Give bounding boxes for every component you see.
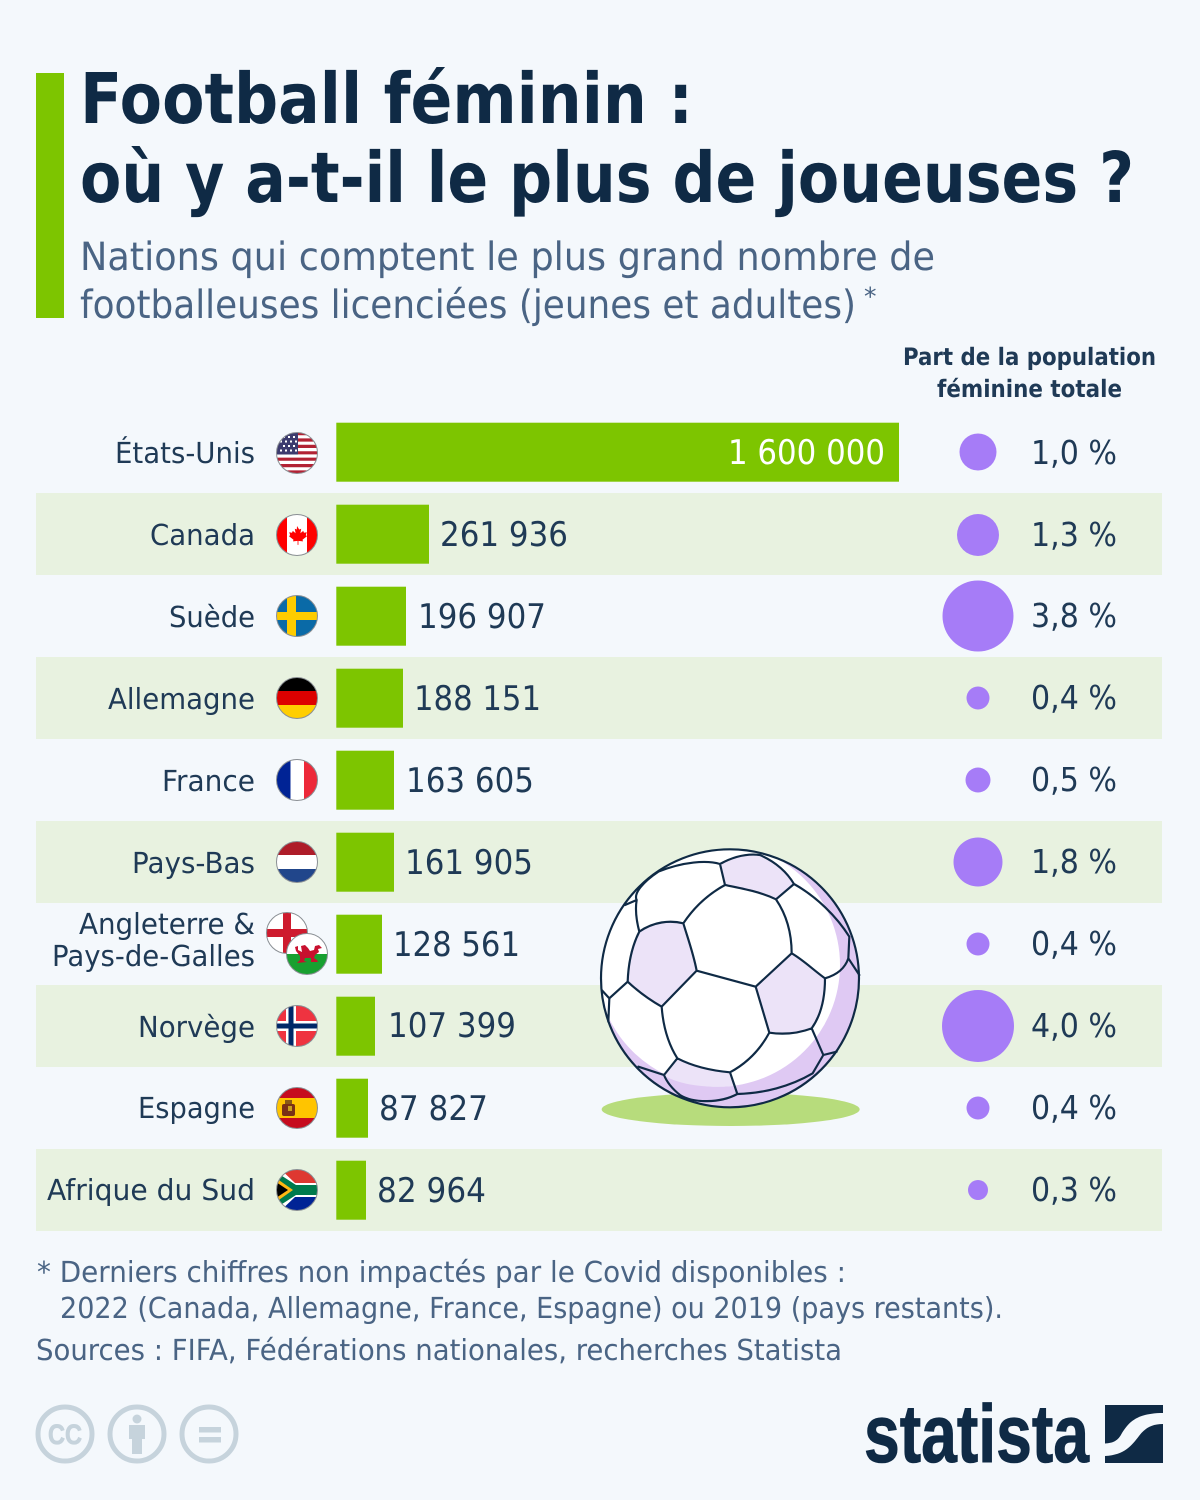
row: Suède: Suède [169,600,255,634]
row: Pays-Bas [36,821,1162,903]
subtitle: Nations qui comptent le plus grand nombre de [80,235,935,280]
row: Pays-Bas: Pays-Bas [132,846,255,880]
row: Angleterre & Pays-de-Galles [52,907,1117,975]
title: Football féminin : [80,58,693,140]
row: Angleterre & Pays-de-Galles: 0,4 % [1031,924,1117,963]
subtitle [80,235,935,328]
row: Angleterre & Pays-de-Galles: 128 561 [393,925,520,965]
sources: Sources : FIFA, Fédérations nationales, recherches Statista [36,1333,842,1367]
footnote [37,1255,1003,1325]
bubble: 1,8 % [954,838,1002,886]
row: Suède [169,580,1117,652]
icon: creative commons [38,1407,92,1461]
bar: 1 600 000 [336,423,899,482]
icon: no derivatives [182,1407,236,1461]
row: Afrique du Sud: Afrique du Sud [47,1173,255,1207]
row: Espagne: 0,4 % [1031,1088,1117,1127]
row: États-Unis: États-Unis [115,436,255,470]
footnote: * Derniers chiffres non impactés par le Covid disponibles : [37,1255,846,1289]
subtitle: * [864,282,876,311]
bubble: 0,4 % [966,1096,990,1120]
grass shadow [602,1093,860,1126]
row: Espagne: 87 827 [379,1089,488,1129]
logo: statista: statista [864,1389,1090,1480]
row: Angleterre & Pays-de-Galles: Pays-de-Galles [52,939,255,973]
bar: 128 561 [336,915,382,974]
row: France: 163 605 [406,761,534,801]
flag: Suède [276,595,318,637]
row: Canada: 261 936 [440,515,568,555]
footnote: 2022 (Canada, Allemagne, France, Espagne) ou 2019 (pays restants). [60,1291,1003,1325]
bubble: 4,0 % [942,990,1014,1062]
bubble: 0,3 % [968,1180,988,1200]
row: Angleterre & Pays-de-Galles: Angleterre & [79,907,255,941]
flag: Pays-Bas [276,841,318,884]
subtitle: footballeuses licenciées (jeunes et adultes) [80,283,856,328]
row: Afrique du Sud: 82 964 [377,1171,486,1211]
flag: Canada [276,514,318,556]
title [80,58,1134,219]
row: Norvège: 107 399 [388,1006,516,1046]
column heading: part de la population féminine totale [903,343,1156,403]
flag: Angleterre [266,912,308,954]
bar: 161 905 [336,833,394,892]
row: Espagne: Espagne [138,1091,255,1125]
flag: Pays de Galles [286,933,328,975]
row: Canada: Canada [150,518,255,552]
logo mark [1105,1405,1163,1463]
illustration: football on grass [597,843,860,1126]
row: Norvège: Norvège [138,1010,255,1044]
icon: attribution [110,1407,164,1461]
row: Canada [36,493,1162,575]
row: Allemagne: 188 151 [414,679,541,719]
flag: Espagne [276,1087,318,1129]
bar: 82 964 [336,1161,366,1220]
row: États-Unis: 1 600 000 [728,433,885,473]
bubble: 0,4 % [966,932,990,956]
bar: 87 827 [336,1079,368,1138]
row: Allemagne: Allemagne [108,682,255,716]
bubble: 1,0 % [960,434,996,470]
row: Allemagne [36,657,1162,739]
bar: 196 907 [336,587,406,646]
flag: Afrique du Sud [276,1169,318,1211]
flag: France [276,759,318,801]
row: Norvège [36,985,1162,1067]
row: États-Unis: 1,0 % [1031,433,1117,472]
bubble: 3,8 % [942,580,1014,652]
bubble: 1,3 % [957,514,999,556]
row: États-Unis [115,423,1117,482]
row: Pays-Bas: 161 905 [405,843,533,883]
row: Norvège: 4,0 % [1031,1006,1117,1045]
row: Canada: 1,3 % [1031,515,1117,554]
icon: creative commons: CC [48,1419,82,1450]
row: Afrique du Sud: 0,3 % [1031,1170,1117,1209]
row: Suède: 196 907 [418,597,546,637]
flag: États-Unis [276,432,318,474]
ball [597,843,859,1107]
row: France: France [162,764,255,798]
bar: 188 151 [336,669,403,728]
flag: Allemagne [276,677,318,720]
bubble: 0,5 % [966,768,990,792]
bar: 163 605 [336,751,394,810]
row: France [162,751,1117,810]
row: Espagne [138,1079,1117,1138]
flag: Norvège [276,1005,318,1047]
bar: 261 936 [336,505,429,564]
row: Afrique du Sud [36,1149,1162,1231]
row: Suède: 3,8 % [1031,596,1117,635]
bar: 107 399 [336,997,375,1056]
column heading: part de la population féminine totale: féminine totale [937,375,1122,403]
column heading: part de la population féminine totale: Part de la population [903,343,1156,371]
row: Pays-Bas: 1,8 % [1031,842,1117,881]
title accent bar [36,73,64,318]
row: Allemagne: 0,4 % [1031,678,1117,717]
row: France: 0,5 % [1031,760,1117,799]
bubble: 0,4 % [966,686,990,710]
